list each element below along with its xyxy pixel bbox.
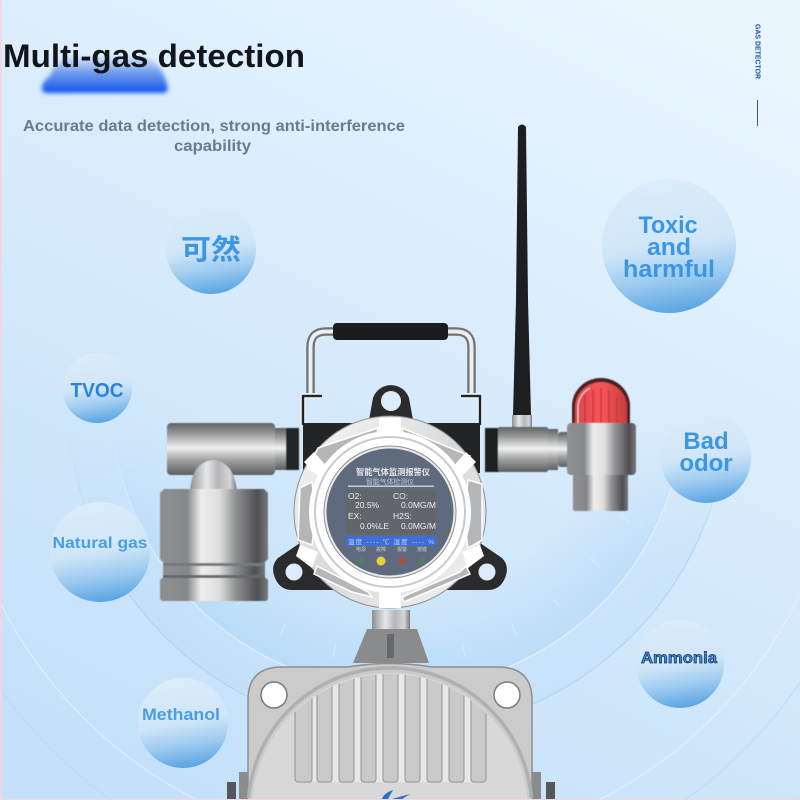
vertical label: gas detector	[754, 24, 762, 126]
subtitle: capability	[174, 138, 251, 155]
bubble: flammable: 可然	[181, 234, 241, 265]
display screen: H2S:	[393, 511, 412, 521]
bubble: natural gas	[50, 502, 150, 602]
display screen: 按键	[417, 546, 427, 553]
display screen: 0.0%LE	[360, 521, 389, 531]
bubble: TVOC	[62, 353, 132, 423]
subtitle: Accurate data detection, strong anti-interference	[23, 118, 405, 135]
bubble: bad odor	[661, 413, 751, 503]
display screen: 智能气体检测仪	[366, 477, 414, 486]
display screen: EX:	[348, 511, 362, 521]
display screen	[326, 448, 454, 576]
display screen: 温度 ---- ℃ 湿度 ---- %	[348, 537, 434, 546]
display screen: 故障	[376, 546, 386, 553]
bubble: flammable	[166, 204, 256, 294]
bubble: ammonia	[636, 620, 724, 708]
bubble: TVOC: TVOC	[70, 380, 124, 402]
left sensor housing	[160, 423, 299, 601]
display screen: 智能气体监测报警仪	[356, 467, 430, 477]
display screen: 0.0MG/M	[401, 500, 436, 510]
notched bezel segments	[298, 428, 482, 602]
right connector and alarm beacon	[485, 378, 636, 511]
bubble: toxic and harmful: harmful	[623, 256, 715, 283]
display screen: O2:	[348, 491, 362, 501]
mounting bracket	[273, 385, 507, 590]
bubble: methanol	[138, 678, 228, 768]
decorative blue blob behind title	[42, 56, 168, 93]
bubble: ammonia: Ammonia	[641, 650, 717, 667]
white notches	[296, 418, 484, 608]
display screen: 报警	[397, 546, 407, 553]
logo	[382, 790, 410, 799]
steel handle	[303, 323, 480, 425]
display screen: 电源	[356, 546, 366, 553]
antenna	[512, 124, 532, 429]
bubble: toxic and harmful	[602, 179, 736, 313]
subtitle	[23, 118, 405, 155]
bubble: natural gas: Natural gas	[52, 535, 148, 552]
vertical label: gas detector: GAS DETECTOR	[754, 24, 762, 80]
bubble: methanol: Methanol	[142, 705, 220, 724]
title: Multi-gas detection	[3, 38, 305, 74]
bubble: bad odor: Bad	[683, 428, 729, 455]
display screen: 0.0MG/M	[401, 521, 436, 531]
display screen: CO:	[393, 491, 408, 501]
detector main body	[294, 416, 486, 608]
bubble: bad odor: odor	[679, 450, 733, 477]
outer metal ring	[294, 416, 486, 608]
bubble: toxic and harmful: and	[647, 234, 691, 261]
bottom junction box	[227, 610, 555, 799]
display screen: 20.5%	[355, 500, 380, 510]
bubble: toxic and harmful: Toxic	[638, 212, 698, 239]
